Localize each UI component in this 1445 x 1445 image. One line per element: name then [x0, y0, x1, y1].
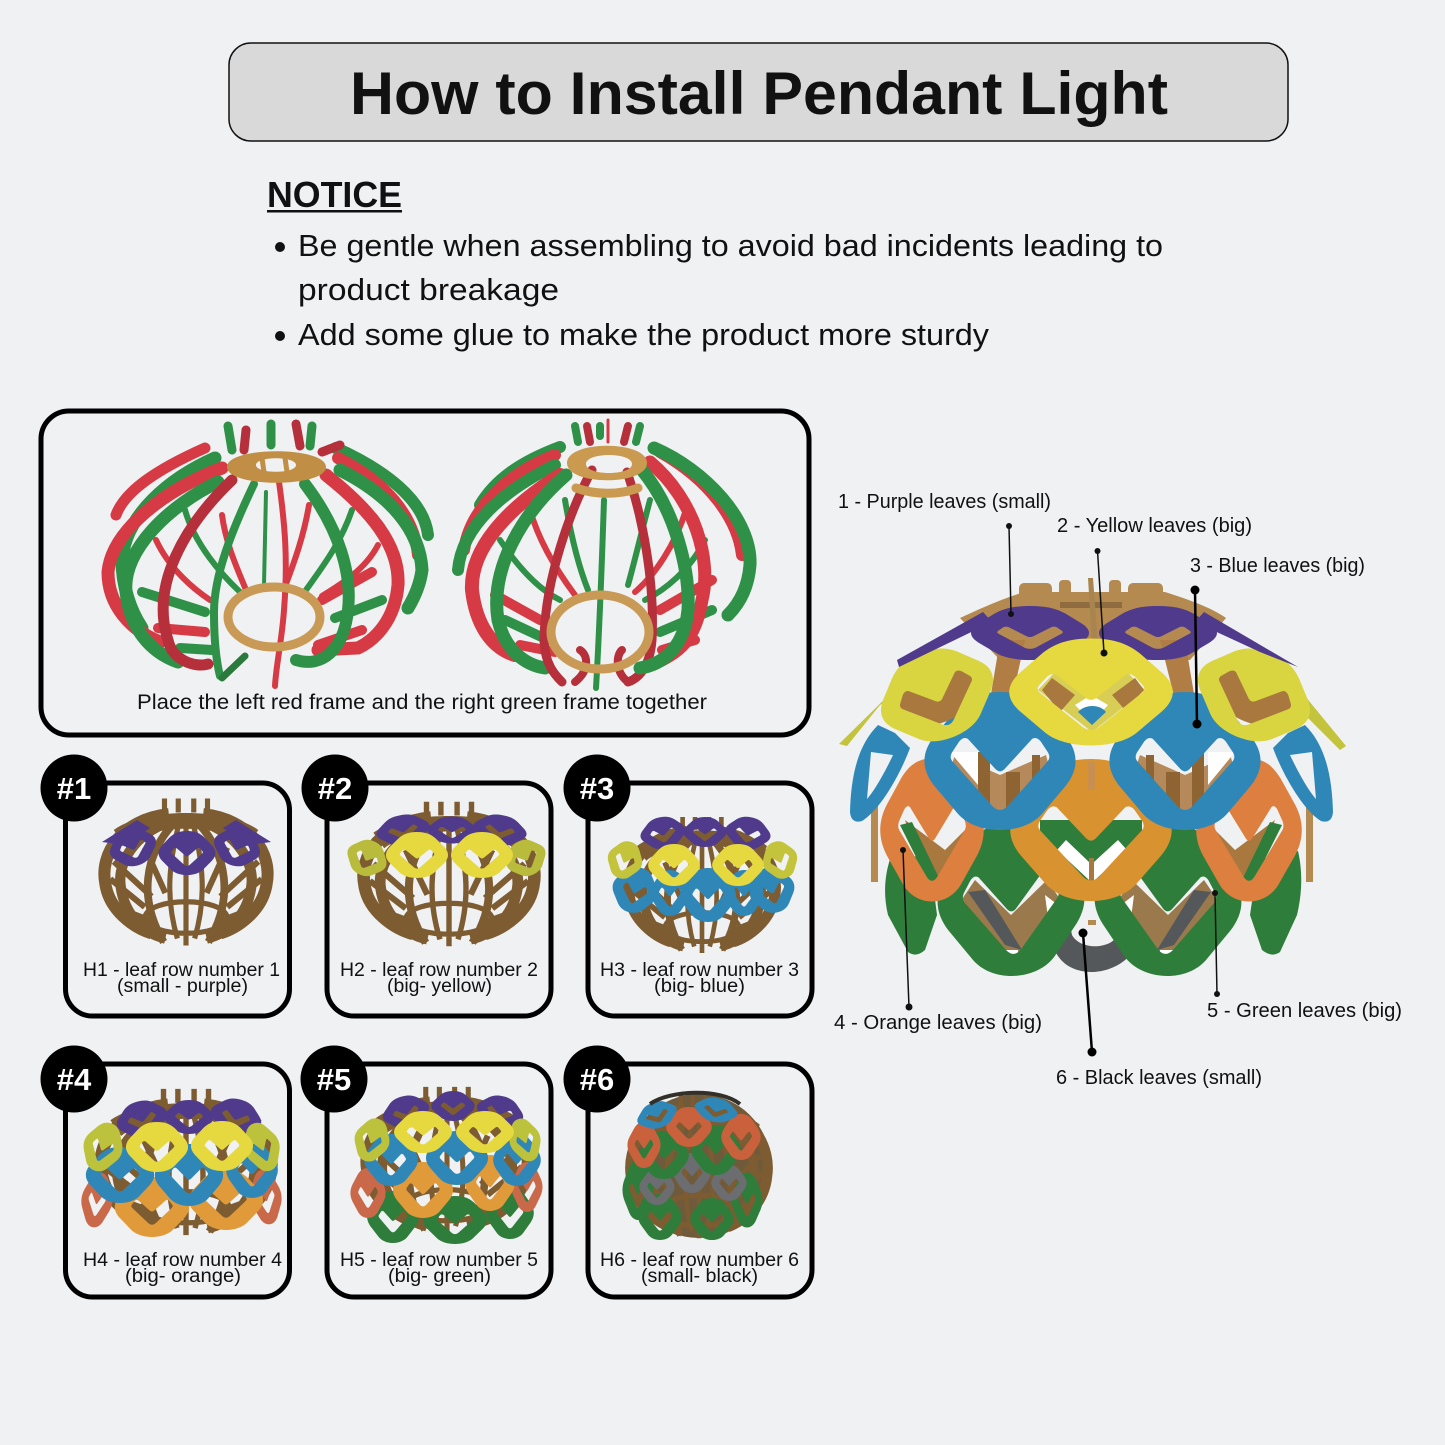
- illustration: left frame: [108, 424, 428, 686]
- lamp: step 2: [341, 802, 552, 946]
- callout 6: black: [1056, 928, 1262, 1089]
- callout 3: blue: [1190, 555, 1365, 728]
- bottom ring: [551, 595, 649, 669]
- step 6 caption: [600, 1250, 799, 1287]
- badge #6: [564, 1046, 630, 1112]
- callout 5: green: 5 - Green leaves (big): [1207, 1000, 1402, 1022]
- step 3 caption: [600, 960, 799, 997]
- bottom ring: [228, 587, 320, 647]
- badge #6: #6: [580, 1062, 614, 1097]
- lamp: step 5: [348, 1087, 547, 1244]
- badge #3: #3: [580, 771, 614, 806]
- badge #1: [40, 754, 108, 822]
- top ring: [567, 420, 647, 493]
- panel: frame assembly: [41, 411, 809, 735]
- step card 4: [40, 1046, 290, 1297]
- step 1 caption: H1 - leaf row number 1: [83, 960, 280, 981]
- step 3 caption: H3 - leaf row number 3: [600, 960, 799, 981]
- step 4 caption: (big- orange): [125, 1266, 241, 1287]
- step 6 caption: H6 - leaf row number 6: [600, 1250, 799, 1271]
- notice bullet 2: Add some glue to make the product more sturdy: [298, 317, 990, 352]
- notice block: [267, 174, 1163, 352]
- title banner: How to Install Pendant Light: [350, 60, 1168, 127]
- large lamp diagram: [839, 578, 1346, 980]
- step 4 caption: [83, 1250, 282, 1287]
- orange leaves: [880, 758, 1302, 902]
- center yellow leaf: [1009, 638, 1173, 746]
- badge #4: [40, 1046, 108, 1112]
- lamp: step 6: [622, 1093, 771, 1240]
- lamp: step 4: [76, 1089, 287, 1237]
- step 2 caption: H2 - leaf row number 2: [340, 960, 538, 981]
- lamp: step 3: [602, 813, 803, 953]
- callout 3: blue: 3 - Blue leaves (big): [1190, 555, 1365, 577]
- orange hole contents: [900, 820, 1282, 895]
- callout 2: yellow: [1057, 515, 1252, 656]
- badge #4: #4: [57, 1062, 92, 1097]
- step card 2: [302, 754, 552, 1016]
- title banner: [229, 43, 1288, 141]
- step 4 caption: H4 - leaf row number 4: [83, 1250, 282, 1271]
- step card 1: [40, 754, 290, 1016]
- callout 1: purple: [838, 491, 1051, 617]
- callout 4: orange: [834, 847, 1042, 1034]
- callout 6: black: 6 - Black leaves (small): [1056, 1067, 1262, 1089]
- badge #1: #1: [57, 771, 91, 806]
- step card 6: [564, 1046, 812, 1297]
- step 5 caption: [340, 1250, 538, 1287]
- green leaf hole contents: [958, 880, 1221, 965]
- illustration: right frame: [458, 420, 750, 688]
- frame caption: Place the left red frame and the right green frame together: [137, 691, 707, 714]
- step 5 caption: H5 - leaf row number 5: [340, 1250, 538, 1271]
- notice bullet 1: product breakage: [298, 272, 559, 307]
- green leaves: [885, 820, 1301, 980]
- notice bullet 1: [275, 228, 1163, 307]
- callout 2: yellow: 2 - Yellow leaves (big): [1057, 515, 1252, 537]
- step card 5: [300, 1046, 551, 1297]
- callout 5: green: [1207, 890, 1402, 1022]
- top ring: [227, 424, 340, 483]
- badge #2: [302, 754, 368, 822]
- yellow hole contents: [1038, 672, 1145, 732]
- step 1 caption: [83, 960, 280, 997]
- wood frame top: [960, 578, 1226, 660]
- black leaves: [1050, 925, 1142, 972]
- step 1 caption: (small - purple): [117, 976, 248, 997]
- interior wood: [871, 640, 1313, 950]
- step 5 caption: (big- green): [388, 1266, 491, 1287]
- blue leaves: [850, 692, 1333, 830]
- badge #3: [564, 754, 630, 822]
- notice bullet 1: Be gentle when assembling to avoid bad incidents leading to: [298, 228, 1163, 263]
- badge #2: #2: [318, 771, 352, 806]
- callout 1: purple: 1 - Purple leaves (small): [838, 491, 1051, 513]
- badge #5: [300, 1046, 368, 1112]
- step 2 caption: (big- yellow): [387, 976, 492, 997]
- notice heading: NOTICE: [267, 174, 402, 215]
- step card 3: [564, 754, 812, 1016]
- side blue leaves: [850, 725, 1333, 822]
- step 3 caption: (big- blue): [654, 976, 745, 997]
- purple leaves: [897, 606, 1298, 667]
- badge #5: #5: [317, 1062, 351, 1097]
- callout 4: orange: 4 - Orange leaves (big): [834, 1012, 1042, 1034]
- lamp: step 1: [102, 798, 271, 946]
- yellow leaves: [839, 631, 1346, 759]
- step 2 caption: [340, 960, 538, 997]
- blue hole contents: [950, 752, 1235, 825]
- step 6 caption: (small- black): [641, 1266, 758, 1287]
